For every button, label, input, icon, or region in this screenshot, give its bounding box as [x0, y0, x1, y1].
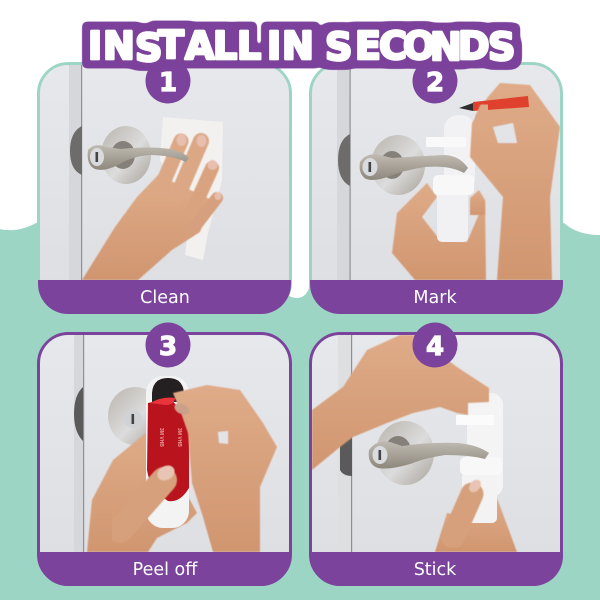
label bar: Clean	[38, 280, 291, 314]
label bar: Mark: Mark	[413, 288, 457, 308]
photo: door, lever, lock template, hands and marker	[312, 65, 560, 285]
step badge 3	[146, 322, 190, 368]
label bar: Stick	[310, 552, 563, 586]
label bar: Stick: Stick	[414, 560, 457, 580]
photo: door, lever and hand wiping with towel	[40, 65, 289, 285]
panel 2: mark	[310, 64, 563, 314]
marker pen	[459, 96, 529, 111]
label bar: Mark	[310, 280, 563, 314]
step badge 2	[412, 58, 458, 104]
title: INSTALL IN SECONDS	[88, 23, 515, 70]
step badge 1: 1	[159, 68, 177, 98]
label bar: Clean: Clean	[140, 288, 190, 308]
step badge 3: 3	[159, 332, 177, 362]
panel 1: clean	[38, 64, 291, 314]
panel 4: stick	[310, 334, 563, 586]
photo: door, knob, hands peeling adhesive tape	[40, 335, 289, 555]
adhesive strip	[146, 376, 189, 528]
label bar: Peel off: Peel off	[133, 560, 198, 580]
adhesive strip: 3M VHB	[158, 428, 164, 447]
panel 3: peel off	[38, 334, 291, 586]
step badge 4: 4	[426, 332, 444, 362]
step badge 2: 2	[426, 68, 444, 98]
label bar: Peel off	[38, 552, 291, 586]
step badge 4	[412, 322, 458, 368]
step badge 1	[146, 58, 190, 104]
adhesive strip: 3M VHB	[176, 428, 182, 447]
photo: door, lever, mounted lock and hands pressing it	[312, 335, 560, 555]
